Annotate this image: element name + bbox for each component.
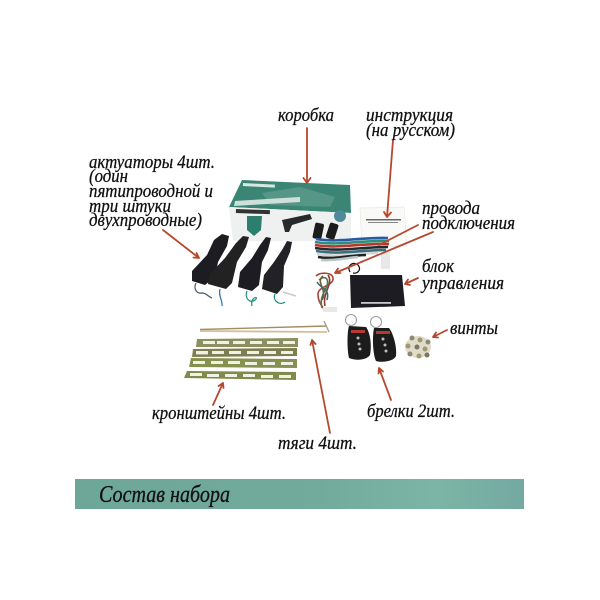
label: instruction: инструкция bbox=[366, 105, 453, 126]
label: instruction bbox=[366, 105, 455, 141]
wiring harness bbox=[315, 238, 390, 273]
actuators bbox=[192, 234, 296, 306]
short wire coil bbox=[316, 273, 337, 312]
rods bbox=[200, 321, 329, 332]
label: box: коробка bbox=[278, 105, 334, 126]
arrow: box bbox=[304, 128, 310, 183]
arrow: fobs bbox=[378, 368, 391, 400]
label: actuators: (один bbox=[89, 166, 128, 187]
label: wires: провода bbox=[422, 198, 480, 219]
actuator 3 bbox=[238, 237, 271, 306]
arrow: screws bbox=[433, 330, 447, 338]
label: actuators bbox=[89, 152, 215, 231]
banner: Состав набора bbox=[75, 479, 524, 509]
label: control unit: блок bbox=[422, 256, 455, 277]
label: brackets: кронштейны 4шт. bbox=[152, 403, 286, 424]
arrows bbox=[163, 128, 447, 433]
arrow: brackets bbox=[213, 383, 224, 405]
label: actuators: актуаторы 4шт. bbox=[89, 152, 215, 173]
label: actuators: три штуки bbox=[89, 196, 171, 217]
label: instruction: (на русском) bbox=[366, 120, 455, 141]
arrow: wires to harness bbox=[379, 225, 418, 245]
fob 2 bbox=[370, 316, 396, 362]
arrow: actuators bbox=[163, 230, 199, 258]
label: rods: тяги 4шт. bbox=[278, 433, 357, 454]
actuator 2 bbox=[208, 236, 249, 306]
bracket 3 bbox=[189, 358, 297, 368]
product box: Spartum bbox=[229, 180, 351, 241]
label: actuators: пятипроводной и bbox=[89, 181, 213, 202]
arrow: wires to coil bbox=[335, 232, 433, 273]
actuator 1 bbox=[192, 234, 229, 298]
fob 1 bbox=[346, 314, 371, 360]
label: screws: винты bbox=[450, 318, 498, 339]
label: actuators: двухпроводные) bbox=[89, 210, 202, 231]
arrow: control unit bbox=[405, 278, 418, 285]
banner: Состав набора: Состав набора bbox=[99, 482, 230, 508]
brackets bbox=[184, 338, 298, 380]
key fobs bbox=[346, 314, 396, 362]
label: control unit: управления bbox=[420, 273, 504, 294]
label: control unit bbox=[420, 256, 504, 294]
label: wires: подключения bbox=[422, 213, 515, 234]
bracket 2 bbox=[192, 348, 297, 357]
bracket 1 bbox=[196, 338, 298, 347]
label: wires bbox=[422, 198, 515, 234]
screws bbox=[405, 336, 431, 358]
instruction sheet bbox=[360, 207, 407, 247]
arrow: instruction bbox=[384, 140, 393, 217]
bracket 4 bbox=[184, 371, 296, 380]
label: key fobs: брелки 2шт. bbox=[367, 401, 455, 422]
arrow: rods bbox=[310, 340, 330, 433]
actuator 4 bbox=[262, 241, 296, 303]
control unit bbox=[350, 275, 405, 308]
